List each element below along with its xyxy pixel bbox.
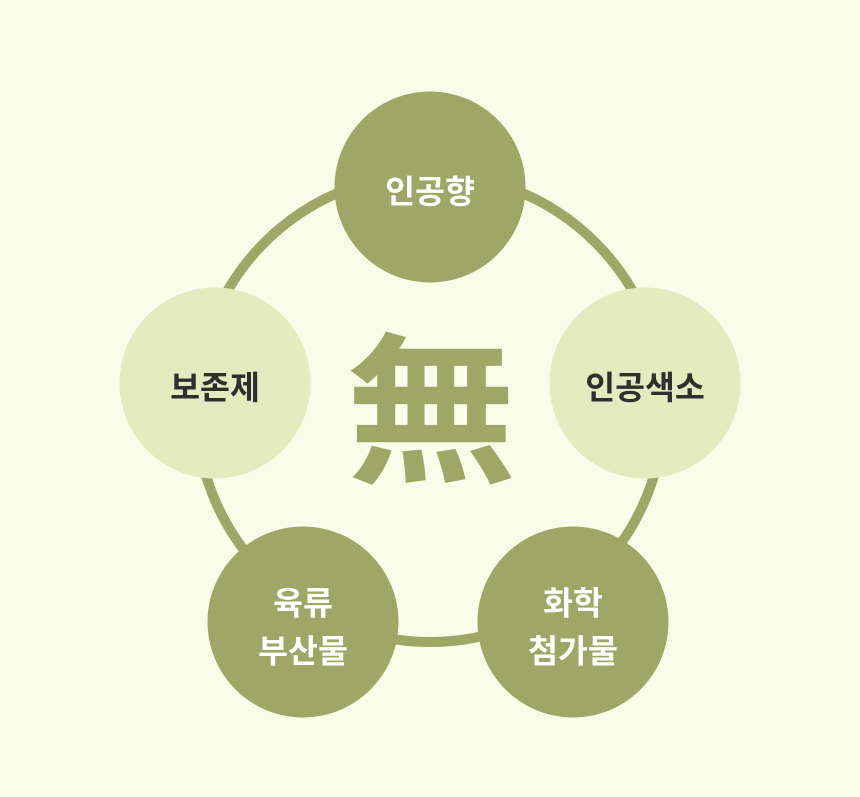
node: 인공향: [334, 92, 526, 282]
connecting ring: [196, 174, 664, 642]
node: 육류 부산물: [208, 526, 398, 718]
node: 육류 부산물: 육류: [273, 586, 333, 622]
node: 화학 첨가물: 화학: [543, 586, 603, 622]
node: 화학 첨가물: [478, 526, 668, 718]
node: 인공향: 인공향: [385, 174, 475, 210]
node: 인공색소: [550, 288, 740, 478]
node: 보존제: [120, 288, 310, 478]
node: 화학 첨가물: 첨가물: [528, 634, 618, 670]
node: 보존제: 보존제: [170, 370, 260, 406]
node: 육류 부산물: 부산물: [258, 634, 348, 670]
node: 인공색소: 인공색소: [585, 370, 705, 406]
central character: 無: 無: [346, 323, 516, 505]
